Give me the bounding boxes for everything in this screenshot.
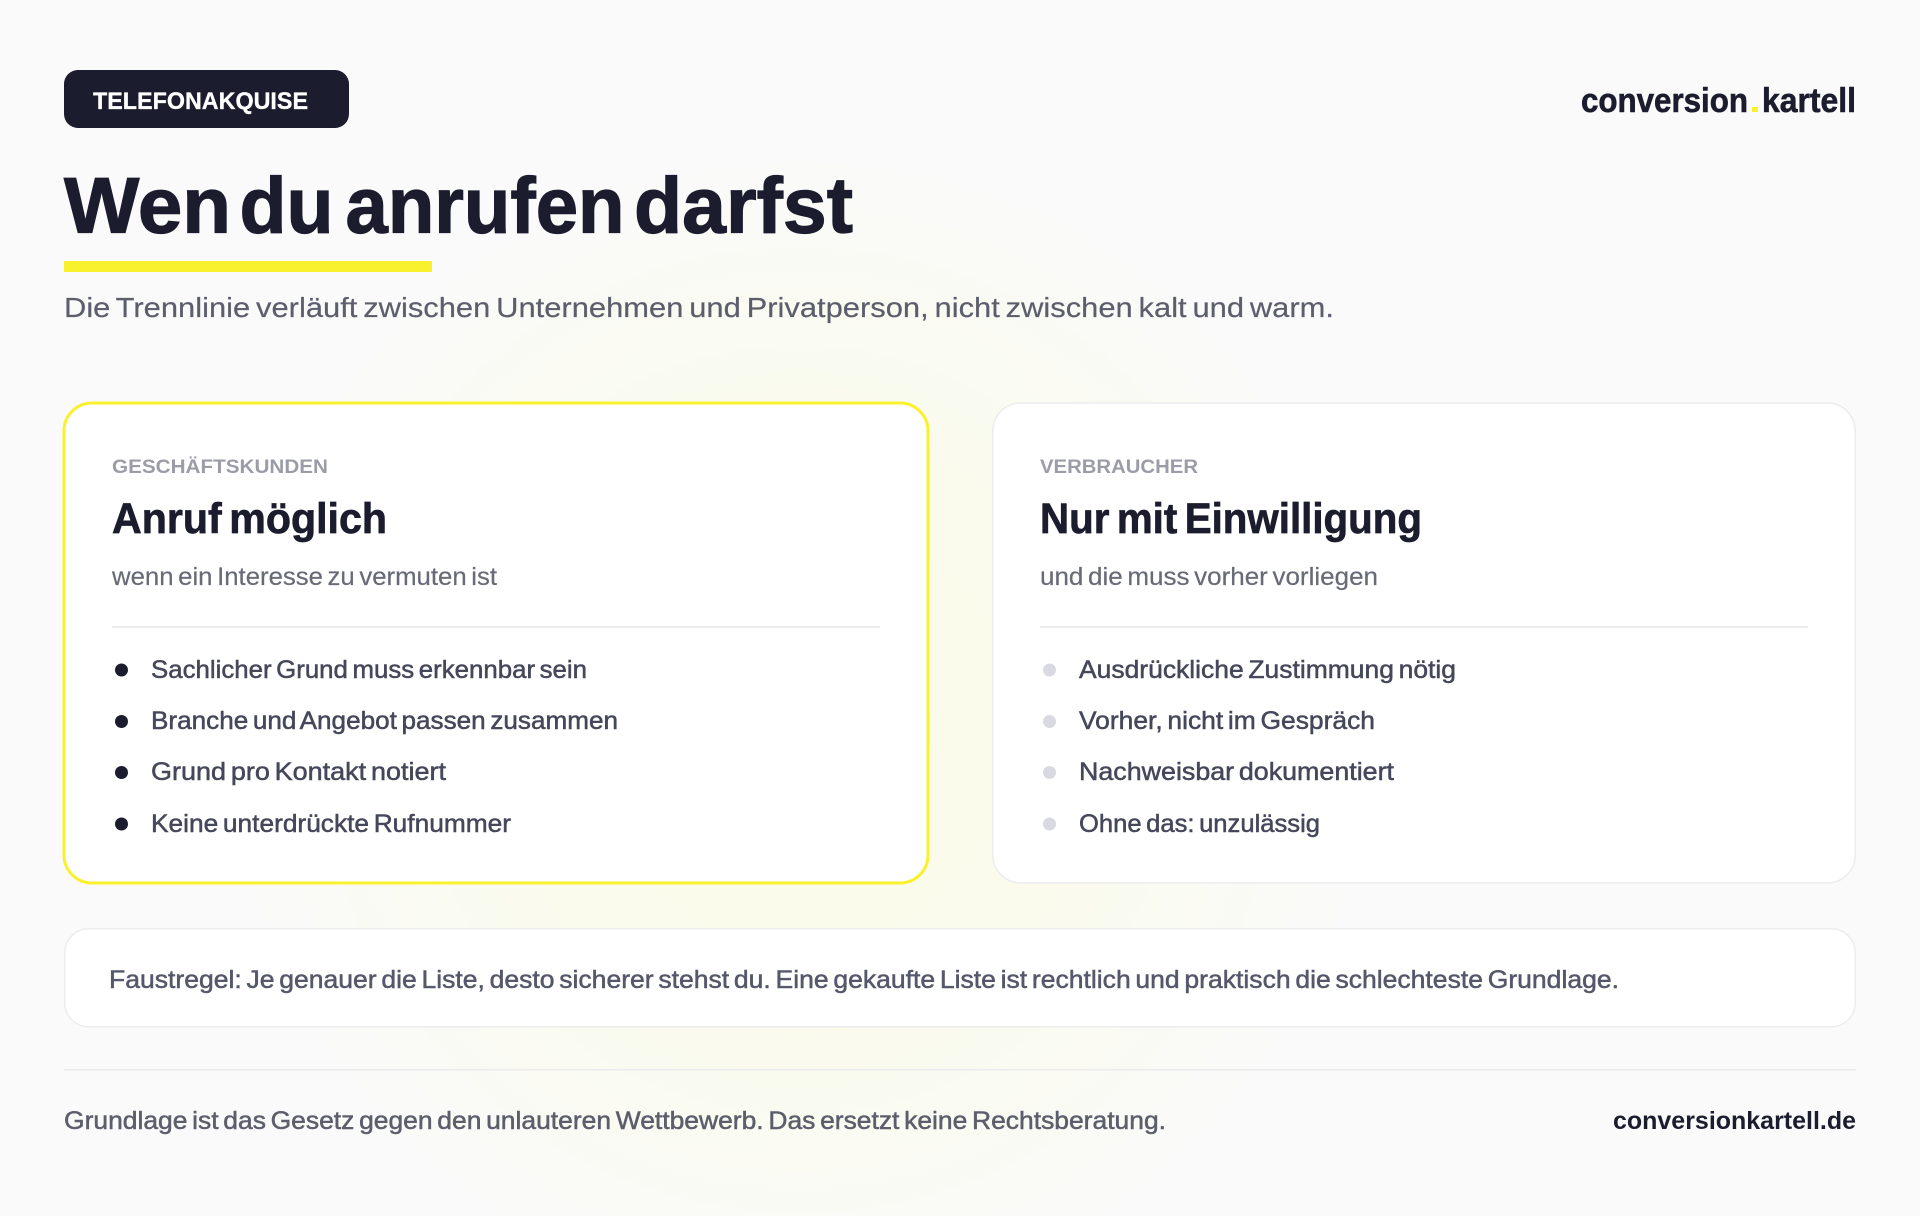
title: du	[240, 160, 334, 250]
card subheading: wenn ein Interesse zu vermuten ist	[111, 563, 497, 591]
footer note: Grundlage ist das Gesetz gegen den unlauteren Wettbewerb. Das ersetzt keine Rechtsberatung.	[64, 1107, 1166, 1135]
callout: Faustregel: Faustregel: Je genauer die Liste, desto sicherer stehst du. Eine gekaufte Liste ist rechtlich und praktisch die schlechteste Grundlage.	[109, 966, 1619, 994]
title underline	[64, 261, 432, 272]
divider	[112, 626, 880, 628]
divider	[1040, 626, 1808, 628]
card heading: Anruf möglich	[112, 495, 387, 543]
eyebrow: VERBRAUCHER	[1040, 456, 1198, 478]
title: anrufen	[346, 160, 624, 250]
callout: Faustregel	[65, 929, 1855, 1027]
eyebrow: GESCHÄFTSKUNDEN	[112, 455, 328, 478]
list item 2: Branche und Angebot passen zusammen	[151, 707, 618, 735]
title: Wen	[64, 160, 231, 250]
panel: Geschäftskunden	[64, 403, 928, 883]
list item 2: Vorher, nicht im Gespräch	[1079, 707, 1375, 735]
subtitle: Die Trennlinie verläuft zwischen Unternehmen und Privatperson, nicht zwischen kalt und warm.	[64, 292, 1334, 323]
list item 1: Ausdrückliche Zustimmung nötig	[1079, 656, 1456, 684]
list item 3: Nachweisbar dokumentiert	[1079, 758, 1394, 786]
badge: Telefonakquise: TELEFONAKQUISE	[93, 88, 308, 115]
logo: conversion.kartell	[1581, 82, 1856, 120]
footer rule	[64, 1069, 1856, 1070]
list item 3: Grund pro Kontakt notiert	[151, 758, 446, 786]
list item 4: Keine unterdrückte Rufnummer	[151, 810, 511, 838]
card subheading: und die muss vorher vorliegen	[1040, 563, 1378, 591]
list item 4: Ohne das: unzulässig	[1079, 810, 1320, 838]
list item 1: Sachlicher Grund muss erkennbar sein	[151, 656, 587, 684]
card heading: Nur mit Einwilligung	[1040, 495, 1422, 543]
panel: Verbraucher	[993, 403, 1855, 883]
title: darfst	[634, 160, 853, 250]
footer url: conversionkartell.de	[1613, 1107, 1856, 1135]
logo: conversion.kartell: kartell	[1762, 82, 1856, 120]
logo: conversion.kartell: conversion	[1581, 82, 1748, 120]
badge: Telefonakquise	[64, 70, 349, 128]
